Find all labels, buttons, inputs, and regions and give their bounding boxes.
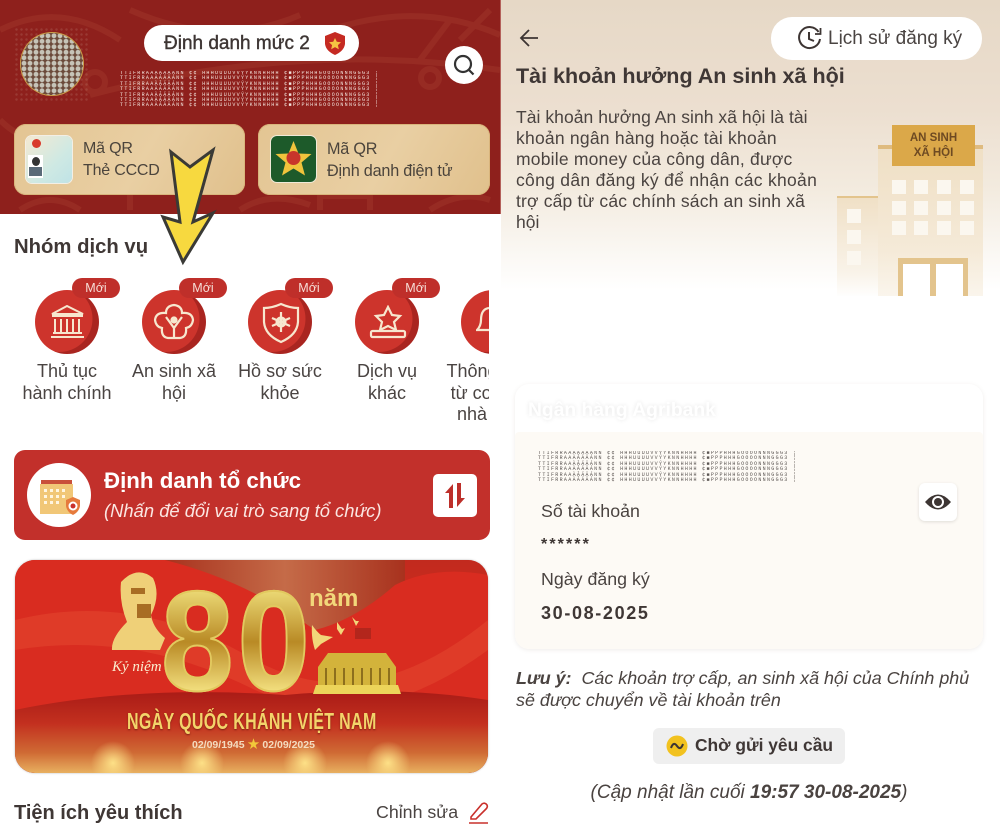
service: other services: Dịch vụ [357,361,417,381]
service: other services [355,278,440,403]
service: health records: Hồ sơ sức [238,361,322,381]
note [516,668,969,710]
description: trợ cấp từ các chính sách an sinh xã [516,191,805,211]
service: social security: An sinh xã [132,361,216,381]
banner title: Định danh tổ chức [104,468,301,493]
pill label: Định danh mức 2 [164,32,310,54]
level pill [144,25,359,61]
door [898,258,968,296]
service: social security [132,278,227,403]
description: khoản ngân hàng hoặc tài khoản [516,128,777,148]
icon: history clock [798,26,822,50]
mausoleum [318,653,396,685]
status label: Chờ gửi yêu cầu [695,735,833,755]
service: other services: Mới [405,281,427,295]
icon: back arrow [520,29,538,47]
service: administrative procedures [22,278,120,403]
icon: pending [666,736,688,756]
heading: service group: Nhóm dịch vụ [14,236,148,258]
card text [83,140,160,179]
service: social security: Mới [192,281,214,295]
service: notifications (cropped): nhà [457,404,487,424]
account label: Số tài khoản [541,501,640,521]
icon: police emblem [271,136,316,182]
service: notifications (cropped) [446,290,489,424]
text: anniversary script: Kỷ niệm [112,659,162,675]
divider strip beside header [500,0,501,214]
sign: XÃ HỘI [914,147,953,159]
card text: Mã QR [83,140,133,157]
date label: Ngày đăng ký [541,569,650,589]
banner: organisation ID [14,450,490,540]
doves [312,617,359,650]
icon: pencil [469,802,488,824]
text: dates: 02/09/1945 ★ 02/09/2025 [192,737,315,751]
last updated: (Cập nhật lần cuối 19:57 30-08-2025) [591,782,907,803]
illustration: social security building [837,125,983,296]
icon: swap button [433,474,477,517]
service: administrative procedures: hành chính [22,383,112,403]
side building [837,196,882,298]
faint bank card [515,384,983,649]
service: social security: hội [162,383,186,403]
header gradient [501,0,1000,300]
service: health records: Mới [298,281,320,295]
card text: Định danh điện tử [327,162,452,180]
flag [355,628,371,639]
edit link: Chỉnh sửa [376,802,458,822]
icon: building in circle [27,463,91,527]
account value: ****** [541,536,591,553]
description [516,107,817,232]
banner: 80th national day [15,560,488,773]
description: công dân đăng ký để nhận các khoản [516,170,817,190]
history button [771,17,982,60]
panel: right phone screen [501,0,1000,834]
main building [878,146,983,296]
avatar (obscured) [14,27,88,101]
panel: left phone screen [0,0,500,834]
obscured name text: TTIFRRAAÀÂÄÃÁNN ¢¢ HHHUUUUVVÝYKNNHHHH ¢■PPPHHHGOOOONNNGGG3 ¦ TTIFRRAAÀÂÄÃÁNN ¢¢ HHHUUUUVVÝYKNNHHHH ¢■PPPHHHGOOOONNNGGG3 ¦ TTIFRRAAÀÂÄÃÁNN ¢¢ HHHUUUUVVÝYKNNHHHH ¢■PPPHHHGOOOONNNGGG3 ¦ TTIFRRAAÀÂÄÃÁNN ¢¢ HHHUUUUVVÝYKNNHHHH ¢■PPPHHHGOOOONNNGGG3 ¦ TTIFRRAAÀÂÄÃÁNN ¢¢ HHHUUUUVVÝYKNNHHHH ¢■PPPHHHGOOOONNNGGG3 ¦ TTIFRRAAÀÂÄÃÁNN ¢¢ HHHUUUUVVÝYKNNHHHH ¢■PPPHHHGOOOONNNGGG3 ¦ TTIFRRAAÀÂÄÃÁNN ¢¢ HHHUUUUVVÝYKNNHHHH ¢■PPPHHHGOOOONNNGGG3 ¦ [120,71,379,108]
card text: Mã QR [327,140,377,158]
sign [892,125,975,166]
service: health records [238,278,333,403]
card text [327,140,452,180]
card: QR CCCD [14,124,245,195]
description: Tài khoản hưởng An sinh xã hội là tài [516,107,808,127]
header background [0,0,500,214]
banner background art [15,560,488,773]
card body [515,432,983,649]
sign: AN SINH [910,132,957,144]
service: administrative procedures: Thủ tục [37,361,97,381]
service: administrative procedures: Mới [85,281,107,295]
card text: Thẻ CCCD [83,162,160,179]
note: Lưu ý: Các khoản trợ cấp, an sinh xã hội của Chính phủ [516,668,969,688]
edit link [376,802,488,824]
banner subtitle: (Nhấn để đổi vai trò sang tổ chức) [104,500,381,521]
text: national day: NGÀY QUỐC KHÁNH VIỆT NAM [127,708,377,734]
note: sẽ được chuyển về tài khoản trên [516,690,781,710]
icon: yellow arrow [160,146,217,266]
button label: Lịch sử đăng ký [828,28,962,49]
bank name (white): Ngân hàng Agribank [528,400,716,421]
description: mobile money của công dân, được [516,149,792,169]
icon: ID card [26,136,72,183]
description: hội [516,212,539,232]
text: năm: năm [309,585,358,612]
status chip [653,728,845,764]
service: health records: khỏe [260,383,300,403]
text: 80 numeral: 80 [161,562,314,721]
heading: favourite utilities: Tiện ích yêu thích [14,802,183,824]
card: QR digital ID [258,124,490,195]
icon: shield badge [325,32,345,55]
portrait silhouette [112,572,165,650]
date value: 30-08-2025 [541,603,650,623]
icon: search button [445,46,483,84]
page title: Tài khoản hưởng An sinh xã hội [516,64,845,88]
service: other services: khác [368,383,406,403]
icon: eye button [919,483,957,521]
